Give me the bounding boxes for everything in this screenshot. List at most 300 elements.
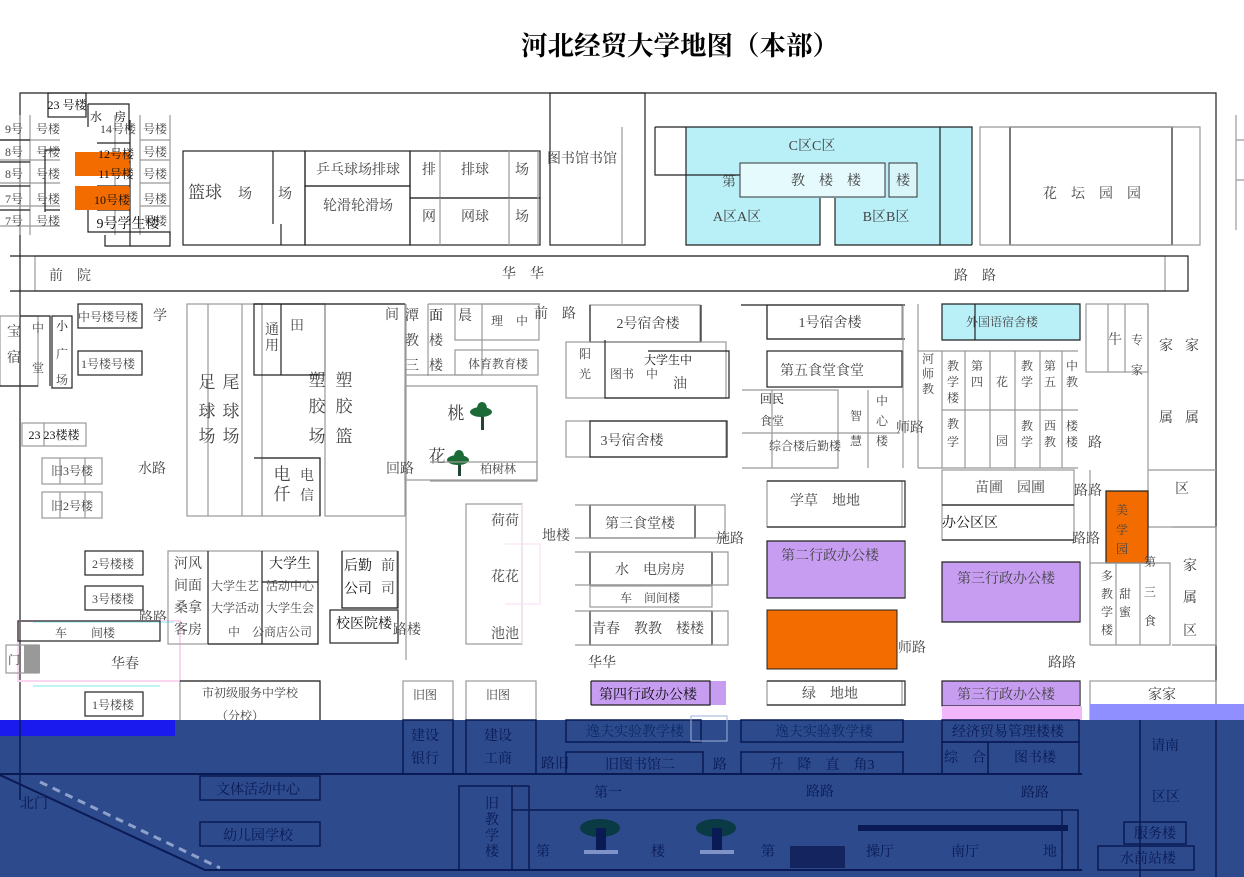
west service block: 河风 (174, 556, 202, 572)
building: 19号楼: 9号学生楼 (96, 215, 160, 232)
building: 12号楼 orange (75, 146, 135, 181)
telecom building: 仟 (274, 485, 290, 504)
orange building (767, 610, 897, 669)
label 路: 路路 (1021, 785, 1049, 801)
dormitory rows: 9号 (5, 122, 23, 136)
building 23: 23 23楼楼 (28, 427, 80, 442)
grid of teaching buildings: 教 (1066, 374, 1078, 389)
building: water room: 水 房 (90, 109, 126, 124)
label 路: 师路 (896, 419, 924, 436)
dormitory rows: 号楼 (143, 166, 168, 181)
icon: south palm 2 (696, 819, 736, 854)
guard: 专 (1131, 332, 1143, 347)
frame line (0, 773, 1082, 775)
vertical dorm cluster: 多 (1101, 569, 1113, 583)
block 6: 逸夫实验教学楼 (586, 723, 685, 740)
flower field 2: 花花 (491, 568, 519, 585)
basketball court (183, 151, 305, 245)
utility building: 用 (265, 338, 279, 354)
building: teaching west: 晨 (458, 308, 472, 324)
building 3号楼 (85, 586, 143, 610)
grid of teaching buildings: 楼 (1066, 418, 1079, 433)
south block 1: 文体活动中心 (216, 781, 301, 798)
label 路: 路 (1088, 435, 1102, 451)
green belt (767, 681, 905, 705)
family housing label: 属 (1185, 410, 1199, 426)
small block 1: 中 (32, 320, 44, 335)
logistics company (342, 551, 398, 608)
grid of teaching buildings: 师 (922, 366, 934, 381)
vertical dorm cluster: 蜜 (1119, 605, 1131, 619)
workshop (590, 586, 712, 607)
grid of teaching buildings: 第 (1044, 359, 1056, 373)
dark bar (858, 825, 1068, 831)
tennis court (410, 198, 540, 245)
flower garden (980, 127, 1200, 245)
telecom building (254, 458, 320, 516)
lawn labels: 第 (761, 844, 775, 860)
family housing 2: 区 (1183, 623, 1197, 639)
block 4: 建设 (411, 727, 439, 744)
label 路: 路楼 (393, 621, 422, 638)
building: teaching west: 三 (405, 358, 419, 374)
road: 前院华华路: 路 路 (954, 268, 996, 284)
water room: 水 电房房 (615, 561, 685, 578)
dormitory rows: 号楼 (36, 166, 61, 181)
residence 2: 1号楼号楼 (81, 356, 136, 371)
west service block: 间面 (174, 578, 202, 594)
panel: old housing (180, 681, 536, 727)
green land (767, 481, 905, 527)
second dining hall (575, 505, 725, 538)
panel: south buildings (0, 716, 1216, 877)
guard: 家 (1131, 362, 1143, 377)
Muslim dining: 中 (876, 393, 888, 408)
south-east blocks: 服务楼 (1134, 825, 1177, 842)
south block 2 (200, 822, 320, 846)
icon: palm tree 2: 花 (428, 447, 446, 466)
football field: 足 (198, 373, 216, 392)
dormitory rows: 号楼 (143, 121, 168, 136)
family housing 2: 家 (1183, 558, 1197, 574)
bright blue strip (0, 720, 175, 736)
old dorm 2: 旧2号楼 (51, 498, 94, 513)
gym small (482, 304, 539, 340)
lavender strip (1090, 704, 1244, 720)
hospital: 校医院楼 (336, 615, 393, 632)
old block 1 (403, 681, 453, 721)
vertical dorm cluster: 甜 (1119, 586, 1131, 601)
plastic basketball court: 塑 (336, 371, 352, 390)
Muslim dining: 慧 (850, 433, 862, 448)
water room (575, 552, 728, 585)
road: 前院华华路 (10, 256, 1188, 291)
dorm 1 (741, 305, 905, 339)
logistics company: 后勤 (344, 557, 372, 574)
hospital (330, 610, 398, 643)
old block 2: 旧图 (486, 688, 510, 702)
volleyball court: 场 (515, 161, 529, 178)
fifth admin purple: 第三行政办公楼 (957, 686, 1056, 703)
plastic basketball court: 胶 (308, 397, 326, 416)
panel: C/A/B blocks (655, 127, 972, 245)
small science block: 光 (579, 366, 591, 381)
Muslim dining (742, 305, 903, 468)
block 5: 建设 (484, 727, 512, 744)
label 区: 区区 (1152, 789, 1180, 805)
family housing 2: 属 (1183, 590, 1197, 606)
vertical dorm cluster: 食 (1144, 614, 1156, 628)
south vertical block (459, 786, 529, 870)
label 路: 路路 (806, 784, 834, 800)
gate (6, 645, 40, 673)
foreign language dorm (942, 304, 1080, 340)
plastic basketball court (254, 304, 405, 516)
third admin purple: 第三行政办公楼 (957, 570, 1056, 587)
table tennis court (305, 151, 410, 186)
angled road (0, 775, 1082, 870)
roller skating field (305, 186, 410, 245)
lawn labels: 操厅 (866, 843, 894, 860)
panel: center buildings (566, 305, 729, 705)
C zone label: C区C区 (789, 138, 835, 154)
panel: far east housing (1086, 304, 1216, 877)
housing lower (1090, 681, 1216, 877)
dorm 3 (566, 421, 727, 457)
block 4: 银行 (411, 751, 439, 767)
grid of teaching buildings: 园 (996, 434, 1008, 448)
tennis court: 网球 (461, 209, 489, 225)
family housing 2 (1172, 527, 1216, 645)
small block 1 (0, 316, 50, 386)
angled road: 北门 (20, 796, 48, 812)
building: teaching west (405, 304, 540, 660)
telecom building: 电 (274, 465, 290, 484)
basketball court: 场 (278, 185, 292, 202)
third admin purple (942, 562, 1080, 622)
B zone label: B区B区 (863, 209, 909, 225)
grid of teaching buildings: 花 (996, 375, 1008, 389)
block 9: 路 (713, 757, 727, 773)
grid of teaching buildings: 四 (971, 375, 983, 389)
restaurant building: （分校） (216, 708, 264, 723)
south vertical block: 旧 (485, 796, 499, 812)
pink road strip: 车 间楼 (55, 625, 116, 640)
restaurant building (180, 681, 320, 727)
桃林 building (430, 461, 537, 481)
west service block: 大学生艺 (211, 578, 259, 593)
second admin purple: 第二行政办公楼 (781, 547, 880, 564)
tennis court: 网 (422, 209, 436, 225)
plastic basketball court: 场 (308, 427, 326, 446)
dorm 1: 1号宿舍楼 (798, 314, 862, 331)
block 11 (942, 742, 1079, 774)
block 7: 旧图书馆二 (605, 756, 675, 773)
small science block: 图书 (610, 366, 634, 381)
west service block: 桑拿 (174, 600, 202, 616)
teaching block: 青春 教教 楼楼 (592, 620, 705, 637)
dormitory rows: 8号 (5, 167, 23, 181)
green belt: 绿 地地 (802, 685, 858, 702)
fifth admin purple (942, 681, 1080, 706)
lawn labels: 第 (536, 844, 550, 860)
grid of teaching buildings: 教 (1044, 434, 1056, 449)
south vertical block: 楼 (485, 843, 500, 860)
grid of teaching buildings: 教 (947, 416, 959, 431)
second admin purple (767, 541, 905, 598)
telecom building: 信 (300, 488, 314, 504)
logistics company: 公司 (344, 581, 372, 597)
building: teaching west: 教 (405, 332, 419, 349)
block 10 (942, 720, 1079, 742)
west service block: 大学生会 (266, 600, 314, 615)
small science block: 大学生中 (644, 352, 692, 367)
volleyball court (410, 151, 540, 198)
small science block (566, 340, 729, 398)
old dorm 1 (42, 458, 102, 484)
panel: sports fields north (183, 151, 540, 245)
label 水路: 水路 (138, 460, 166, 477)
building: 10号楼 orange (75, 186, 131, 210)
block 4 (403, 720, 453, 774)
cyan block outlines (655, 127, 972, 245)
label 春路 center: 回路 (386, 461, 414, 477)
building 1号楼: 1号楼楼 (92, 697, 135, 712)
volleyball court: 排 (422, 161, 436, 178)
orange tall: 学 (1116, 523, 1128, 537)
east label: 请南 (1151, 737, 1179, 754)
block 5: 工商 (484, 751, 512, 767)
panel: dark blue band (0, 720, 1244, 877)
road: 前院华华路: 前 院 (49, 268, 91, 284)
office area: 办公区区 (942, 514, 998, 531)
residence 1 (78, 304, 167, 328)
grid of teaching buildings: 楼 (1066, 434, 1079, 449)
west service block: 大学活动 (211, 600, 259, 615)
label 路: 第一 (594, 785, 622, 801)
fourth admin purple: 第四行政办公楼 (599, 686, 698, 703)
grid of teaching buildings: 教 (922, 381, 934, 396)
dormitory rows: 14号楼 (100, 121, 137, 136)
building: 12号楼 orange: 12号楼 (98, 146, 135, 161)
label 路: 施路 (716, 531, 744, 547)
grid of teaching buildings: 学 (1021, 375, 1033, 389)
west service block: 中 公商店公司 (228, 624, 312, 639)
label 路: 路路 (1072, 531, 1100, 547)
桃林 building: 柏树林 (480, 461, 516, 476)
label 华: 华华 (588, 654, 616, 671)
football field: 球 (198, 402, 216, 421)
volleyball court: 排球 (461, 161, 489, 178)
icon: palm tree 2 (428, 447, 469, 476)
block 11: 图书楼 (1014, 749, 1057, 766)
pink strip (942, 706, 1082, 720)
grid of teaching buildings: 西 (1044, 419, 1056, 433)
block 8 (741, 720, 903, 742)
basketball court: 场 (238, 185, 252, 202)
icon: palm tree (448, 402, 492, 430)
dorm 2: 2号宿舍楼 (616, 315, 680, 332)
grid of teaching buildings: 学 (947, 375, 959, 389)
plastic basketball court: 胶 (336, 397, 354, 416)
grid of teaching buildings: 学 (1021, 435, 1033, 449)
flower garden: 花 坛 园 园 (1043, 185, 1141, 202)
building: teaching west: 楼 (429, 357, 444, 374)
football field (187, 304, 262, 516)
central teaching block: 教 楼 楼 (763, 172, 862, 189)
icon: south palm 1 (580, 819, 620, 854)
plastic basketball court: 篮 (336, 427, 352, 446)
south block 2: 幼儿园学校 (223, 827, 294, 844)
physical education: 体育教育楼 (468, 356, 529, 371)
block navy (790, 846, 845, 868)
residence 2 (78, 351, 142, 375)
block 11: 综 合 (944, 750, 986, 766)
south-east blocks: 水前站楼 (1120, 850, 1177, 867)
utility building: 通 (265, 322, 279, 338)
residence 1: 学 (153, 308, 167, 324)
central teaching block: 第 (722, 174, 736, 190)
dormitory rows: 号楼 (143, 213, 168, 228)
building: teaching west: 潭 (405, 308, 419, 324)
building 2号楼 (85, 551, 143, 575)
gym small: 中 (516, 313, 528, 328)
building: teaching west: 楼 (429, 332, 444, 349)
fourth admin purple (591, 681, 726, 705)
small block 1: 堂 (32, 360, 44, 375)
basketball court: 篮球 (188, 183, 222, 202)
block 7 (566, 752, 703, 774)
gym small: 理 (491, 314, 503, 328)
office area (942, 505, 1074, 540)
panel: west small buildings (0, 304, 180, 716)
vertical dorm cluster: 三 (1144, 585, 1156, 599)
label 前路: 前 路 (534, 306, 576, 322)
A zone label: A区A区 (713, 209, 761, 225)
west service block (168, 551, 318, 644)
label 师路: 师路 (898, 639, 926, 656)
old dorm 2 (42, 492, 102, 518)
utility building: 田 (290, 319, 304, 334)
small square: 小 (56, 319, 69, 333)
south-east blocks (1098, 822, 1194, 870)
block 9 (713, 752, 903, 774)
central teaching block: 楼 (896, 172, 911, 189)
lawn labels: 楼 (651, 843, 666, 860)
small square (52, 316, 72, 388)
residence 1: 中号楼号楼 (78, 309, 139, 324)
old block 1: 旧图 (413, 688, 437, 702)
lawn labels (536, 843, 1057, 860)
dormitory rows (0, 115, 170, 235)
building: 10号楼 orange: 10号楼 (94, 192, 131, 207)
workshop: 车 间间楼 (620, 590, 681, 605)
second dining hall: 第三食堂楼 (605, 515, 676, 532)
vertical dorm cluster: 楼 (1101, 622, 1114, 637)
small science block: 油 (673, 375, 687, 392)
grid of teaching buildings: 五 (1044, 375, 1056, 389)
building 2号楼: 2号楼楼 (92, 556, 135, 571)
housing lower: 家家 (1148, 687, 1176, 703)
dormitory rows: 号楼 (36, 191, 61, 206)
cyan block (686, 127, 972, 245)
title: 河北经贸大学地图（本部） (521, 31, 839, 61)
orange tall: 园 (1116, 542, 1128, 556)
logistics company: 前 (381, 558, 395, 574)
foreign language dorm: 外国语宿舍楼 (966, 314, 1039, 329)
building: water room (88, 104, 129, 130)
road label 华: 华春 (111, 655, 139, 672)
family housing label (1090, 304, 1216, 645)
football field: 球 (222, 402, 240, 421)
physical education (455, 350, 538, 375)
block 6 (566, 716, 727, 742)
tennis court: 场 (515, 208, 529, 225)
block 9: 升 降 直 角3 (770, 757, 874, 773)
old block 2 (466, 681, 536, 721)
block 8: 逸夫实验教学楼 (775, 723, 874, 740)
grid of teaching buildings (918, 304, 1079, 468)
football field: 场 (222, 427, 240, 446)
panel: fields (168, 304, 422, 644)
small block 1: 宝 (7, 324, 21, 340)
gate: 门 (8, 652, 20, 667)
flower field 2 (466, 504, 540, 644)
family housing label: 家 (1159, 338, 1173, 354)
lawn labels: 南厅 (951, 843, 979, 860)
building: teaching west: 面 (429, 308, 443, 324)
east small buildings (1236, 115, 1244, 230)
Muslim dining: 心 (876, 414, 889, 428)
dormitory rows: 号楼 (36, 121, 61, 136)
panel: east buildings (918, 304, 1102, 720)
small science block: 中 (646, 366, 658, 381)
grid of teaching buildings: 教 (947, 358, 959, 373)
guard: 牛 (1108, 331, 1122, 348)
orange tall (1106, 491, 1148, 563)
panel: northwest dormitories (0, 93, 170, 246)
dormitory rows: 8号 (5, 145, 23, 159)
building: 12号楼 orange: 11号楼 (98, 166, 135, 181)
building: 23号楼: 23 号楼 (47, 97, 87, 112)
labels 路: 地楼 (542, 527, 571, 544)
label 路: 路路 (1074, 483, 1102, 499)
grid of teaching buildings: 楼 (947, 390, 960, 405)
utility building (254, 304, 325, 375)
building 1号楼 (85, 692, 143, 716)
flower garden: 苗圃 园圃 (975, 479, 1045, 496)
west service block: 客房 (174, 621, 202, 638)
Muslim dining: 楼 (876, 433, 889, 448)
Muslim dining: 回民 (760, 392, 784, 406)
orange tall: 美 (1116, 503, 1128, 517)
street shops label: 路旧 (541, 756, 569, 772)
guard (1086, 304, 1148, 377)
building 23 (22, 423, 86, 446)
flower field 2: 荷荷 (491, 513, 519, 529)
Muslim dining: 智 (850, 409, 862, 423)
south block 1 (200, 776, 320, 800)
green land: 学草 地地 (790, 492, 860, 509)
fifth dining: 第五食堂食堂 (780, 362, 864, 379)
roller skating field: 轮滑轮滑场 (323, 197, 393, 214)
building: 19号楼 (88, 210, 170, 246)
dorm 2 (590, 305, 701, 342)
west service block: 大学生 (269, 555, 311, 572)
dormitory rows: 7号 (5, 214, 23, 228)
building 3号楼: 3号楼楼 (92, 591, 135, 606)
central teaching block (722, 163, 917, 197)
